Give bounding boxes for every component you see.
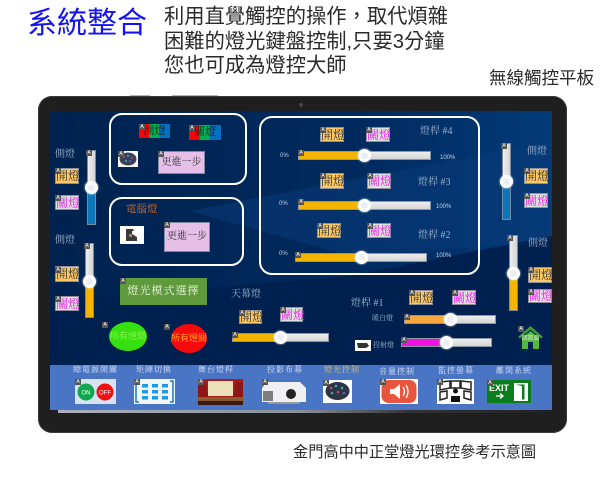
ceiling slider	[232, 333, 329, 342]
right side light 2 label: 側燈	[528, 238, 548, 249]
nav icon: monitor	[437, 379, 474, 404]
lamp bar 1 label: 燈桿 #1	[351, 298, 384, 309]
bottom navigation bar	[50, 365, 552, 410]
vertical slider blue	[502, 143, 511, 220]
badge set: widget markers: A	[119, 151, 123, 157]
lamp bar 1 on: 開燈	[410, 291, 434, 305]
row 4 percent max: 100%	[440, 155, 455, 161]
button: all lights off	[171, 324, 207, 353]
badge set: widget markers: A	[56, 168, 60, 174]
title: 系統整合	[27, 7, 147, 40]
badge set: widget markers: A	[56, 296, 60, 302]
button: lighting mode selection: 燈光模式選擇	[128, 285, 200, 297]
button: RGB off	[189, 125, 221, 140]
badge set: widget markers: A	[121, 278, 125, 284]
vertical slider yellow	[509, 235, 518, 311]
button: lighting mode selection	[120, 278, 207, 305]
badge set: widget markers: A	[76, 379, 80, 385]
panel: fixture group	[109, 113, 247, 185]
badge set: widget markers: A	[165, 222, 169, 228]
nav label: matrix: 矩陣切換	[136, 365, 172, 374]
nav label: monitor: 監控螢幕	[438, 366, 474, 375]
icon: home	[518, 326, 543, 349]
button: off: 關燈	[525, 194, 549, 208]
button: more	[164, 222, 210, 252]
nav label: projection screen: 投影布幕	[267, 365, 303, 374]
nav label: volume: 音量控制	[379, 367, 415, 376]
row 3 slider	[298, 201, 431, 210]
nav icon: power on off: OFF	[99, 390, 111, 396]
left side light 2 label: 側燈	[55, 235, 75, 246]
badge set: widget markers: A	[519, 326, 523, 332]
nav icon: matrix	[134, 379, 175, 404]
row 4 off: 關燈	[367, 128, 391, 142]
badge set: widget markers: A	[56, 267, 60, 273]
ceiling label: 天幕燈	[231, 289, 261, 300]
button: all lights on	[109, 322, 147, 351]
left side light 1 label: 側燈	[55, 149, 75, 160]
badge set: widget markers: A	[159, 151, 163, 157]
camera	[299, 103, 303, 107]
row 2 percent max: 100%	[436, 253, 451, 259]
badge set: widget markers: A	[233, 332, 237, 338]
badge set: widget markers: A	[165, 324, 169, 330]
icon: stage light	[118, 151, 138, 167]
row 2 slider	[295, 253, 427, 262]
nav label: exit: 離開系統	[496, 366, 532, 375]
nav icon: projector	[262, 382, 306, 404]
projection slider	[401, 338, 492, 347]
row 2 off: 關燈	[368, 224, 392, 238]
nav label: power: 總電源開關	[73, 365, 118, 374]
badge set: widget markers: A	[87, 150, 91, 156]
badge set: widget markers: A	[299, 150, 303, 156]
button: on: 開燈	[56, 169, 80, 183]
badge set: widget markers: A	[453, 290, 457, 296]
nav icon: power on off	[75, 379, 116, 404]
badge set: widget markers: A	[318, 223, 322, 229]
badge set: widget markers: A	[529, 289, 533, 295]
icon: projection light	[355, 340, 371, 351]
vertical slider blue	[87, 150, 96, 225]
tablet body	[38, 96, 567, 433]
badge set: widget markers: A	[525, 168, 529, 174]
tablet top buttons	[130, 95, 218, 96]
intro text: 您也可成為燈控大師	[164, 55, 347, 77]
ceiling off: 關燈	[281, 308, 305, 322]
button: on: 開燈	[529, 268, 553, 282]
projection label: 投射燈	[373, 341, 394, 349]
panel: computer light	[109, 197, 244, 266]
button: off: 關燈	[56, 297, 80, 311]
badge set: widget markers: A	[410, 290, 414, 296]
badge set: widget markers: A	[438, 379, 442, 385]
row 4 percent min: 0%	[280, 153, 289, 159]
icon: computer light	[120, 226, 144, 244]
nav label: lighting control: 燈光控制	[324, 365, 360, 374]
badge set: widget markers: A	[502, 143, 506, 149]
row 3 label: 燈桿 #3	[418, 177, 450, 188]
row 3 off: 關燈	[368, 174, 392, 188]
badge set: widget markers: A	[190, 125, 194, 131]
vertical slider yellow	[85, 243, 94, 318]
badge set: widget markers: A	[381, 379, 385, 385]
tablet label: 無線觸控平板	[489, 68, 594, 88]
badge set: widget markers: A	[56, 195, 60, 201]
badge set: widget markers: A	[488, 380, 492, 386]
button: RGB off: 關燈	[194, 126, 216, 138]
intro text	[164, 6, 448, 77]
lamp bar 1 off: 關燈	[453, 291, 477, 305]
badge set: widget markers: A	[103, 322, 107, 328]
button: more: 更進一步	[167, 231, 207, 242]
badge set: widget markers: A	[240, 310, 244, 316]
row 2 on: 開燈	[318, 224, 342, 238]
button: on: 開燈	[525, 169, 549, 183]
badge set: widget markers: A	[368, 223, 372, 229]
nav icon: exit: EXIT	[489, 383, 510, 393]
nav icon: lighting	[323, 380, 352, 403]
badge set: widget markers: A	[402, 337, 406, 343]
badge set: widget markers: A	[321, 173, 325, 179]
label: computer light: 電腦燈	[126, 204, 158, 215]
intro text: 困難的燈光鍵盤控制,只要3分鐘	[164, 30, 445, 52]
right side light 1 label: 側燈	[527, 146, 547, 157]
button: more	[158, 151, 205, 174]
row 3 percent min: 0%	[279, 201, 288, 207]
row 3 percent max: 100%	[436, 204, 451, 210]
badge set: widget markers: A	[85, 243, 89, 249]
badge set: widget markers: A	[508, 235, 512, 241]
badge set: widget markers: A	[281, 307, 285, 313]
badge set: widget markers: A	[199, 379, 203, 385]
badge set: widget markers: A	[529, 267, 533, 273]
badge set: widget markers: A	[321, 127, 325, 133]
badge set: widget markers: A	[405, 314, 409, 320]
badge set: widget markers: A	[525, 193, 529, 199]
badge set: widget markers: A	[296, 252, 300, 258]
ceiling on: 開燈	[240, 310, 264, 324]
button: more: 更進一步	[162, 157, 202, 168]
row 2 label: 燈桿 #2	[418, 230, 450, 241]
screen background	[50, 111, 552, 365]
button: all lights on: 所有燈開	[110, 331, 146, 341]
button: RGB on	[139, 124, 170, 138]
badge set: widget markers: A	[324, 380, 328, 386]
badge set: widget markers: A	[299, 199, 303, 205]
nav icon: power on off: ON	[82, 390, 90, 396]
warm white label: 暖白燈	[372, 314, 393, 322]
button: RGB on: 開燈	[144, 125, 166, 137]
badge set: widget markers: A	[263, 379, 267, 385]
button: all lights off: 所有燈關	[171, 333, 207, 343]
badge set: widget markers: A	[367, 127, 371, 133]
button: off: 關燈	[56, 196, 80, 210]
button: on: 開燈	[56, 267, 80, 281]
badge set: widget markers: A	[140, 124, 144, 130]
badge set: widget markers: A	[135, 379, 139, 385]
intro text: 利用直覺觸控的操作，取代煩雜	[164, 6, 448, 28]
icon: home: 回首頁	[521, 333, 540, 342]
nav icon: volume	[380, 379, 418, 404]
badge set: widget markers: A	[368, 173, 372, 179]
row 4 slider	[298, 151, 431, 160]
nav icon: stage	[198, 379, 243, 405]
row 4 on: 開燈	[321, 128, 345, 142]
warm white slider	[404, 315, 496, 324]
caption: 金門高中中正堂燈光環控參考示意圖	[293, 444, 536, 461]
row 4 label: 燈桿 #4	[420, 126, 452, 137]
panel: lamp bars	[259, 116, 480, 275]
nav label: stage: 舞台燈桿	[198, 365, 234, 374]
button: off: 關燈	[529, 289, 553, 303]
nav icon: exit	[487, 380, 531, 403]
row 2 percent min: 0%	[279, 251, 288, 257]
tablet bottom highlight	[58, 410, 546, 413]
row 3 on: 開燈	[321, 174, 345, 188]
